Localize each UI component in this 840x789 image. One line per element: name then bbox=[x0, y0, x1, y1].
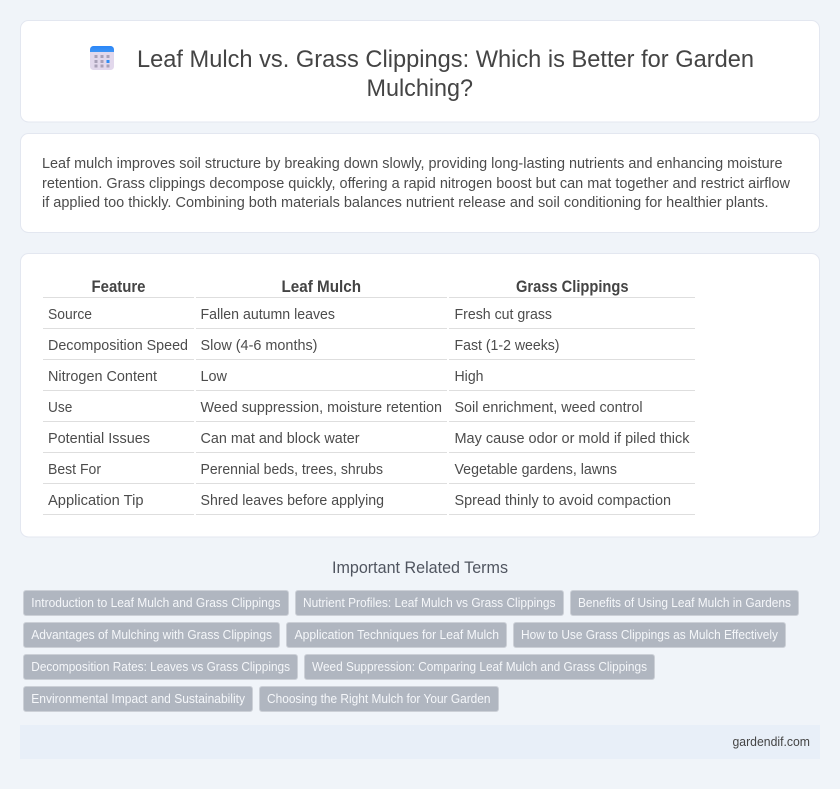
panel: comparison table bbox=[20, 254, 820, 537]
table row: decomposition speed bbox=[43, 338, 695, 360]
table row: source: Fresh cut grass bbox=[454, 307, 552, 323]
footer: gardendif.com bbox=[732, 734, 810, 749]
table header row bbox=[43, 278, 695, 298]
table header row: Leaf Mulch bbox=[282, 278, 361, 296]
text block: summary: if applied too thickly. Combining both materials balances nutrient release and soil conditioning for healthier plants. bbox=[42, 195, 768, 211]
tag: Environmental Impact and Sustainability bbox=[31, 691, 246, 706]
tag bbox=[24, 686, 252, 712]
title: Mulching? bbox=[366, 75, 473, 102]
table row: best for: Best For bbox=[48, 462, 101, 478]
table row: use: Weed suppression, moisture retention bbox=[200, 400, 442, 416]
text block: summary bbox=[42, 156, 790, 211]
table row: nitrogen content: Nitrogen Content bbox=[48, 369, 157, 385]
tag bbox=[24, 654, 298, 680]
tag: Decomposition Rates: Leaves vs Grass Clippings bbox=[31, 659, 290, 674]
table header row: Feature bbox=[92, 278, 146, 296]
table row: use: Soil enrichment, weed control bbox=[454, 400, 642, 416]
icon: calendar bbox=[90, 46, 114, 70]
table row: best for: Perennial beds, trees, shrubs bbox=[200, 462, 383, 478]
title: Leaf Mulch vs. Grass Clippings: Which is Better for Garden bbox=[137, 46, 754, 73]
panel: introduction bbox=[20, 134, 820, 232]
table row: decomposition speed: Fast (1-2 weeks) bbox=[454, 338, 560, 354]
tag: Advantages of Mulching with Grass Clippings bbox=[31, 627, 272, 642]
tag: Benefits of Using Leaf Mulch in Gardens bbox=[578, 595, 791, 610]
table row: potential issues: Potential Issues bbox=[48, 431, 150, 447]
table row: decomposition speed: Slow (4-6 months) bbox=[200, 338, 318, 354]
table row: nitrogen content: High bbox=[454, 369, 484, 385]
tag: Nutrient Profiles: Leaf Mulch vs Grass Clippings bbox=[303, 595, 556, 610]
tag: Application Techniques for Leaf Mulch bbox=[294, 627, 499, 642]
tag bbox=[514, 622, 786, 648]
table row: application tip bbox=[43, 493, 695, 515]
tag bbox=[304, 654, 654, 680]
table row: nitrogen content bbox=[43, 369, 695, 391]
tag bbox=[570, 590, 798, 616]
title bbox=[137, 46, 754, 102]
table row: use: Use bbox=[48, 400, 72, 416]
tag: Choosing the Right Mulch for Your Garden bbox=[267, 691, 490, 706]
table header row: Grass Clippings bbox=[516, 278, 628, 296]
table row: potential issues: May cause odor or mold if piled thick bbox=[454, 431, 690, 447]
table row: best for bbox=[43, 462, 695, 484]
table row: application tip: Shred leaves before applying bbox=[200, 493, 384, 509]
text block: summary: Leaf mulch improves soil structure by breaking down slowly, providing long-lasting nutrients and enhancing moisture bbox=[42, 156, 782, 172]
table row: application tip: Spread thinly to avoid compaction bbox=[454, 493, 671, 509]
table row: potential issues bbox=[43, 431, 695, 453]
table row: source bbox=[43, 307, 695, 329]
text block: summary: retention. Grass clippings decompose quickly, offering a rapid nitrogen boost but can mat together and restrict airflow bbox=[42, 176, 790, 192]
table row: nitrogen content: Low bbox=[200, 369, 227, 385]
table row: source: Fallen autumn leaves bbox=[200, 307, 335, 323]
tag bbox=[296, 590, 564, 616]
tag: Introduction to Leaf Mulch and Grass Clippings bbox=[31, 595, 280, 610]
tag: How to Use Grass Clippings as Mulch Effectively bbox=[521, 627, 779, 642]
tag bbox=[286, 622, 506, 648]
tag bbox=[24, 590, 288, 616]
heading: important related terms: Important Related Terms bbox=[332, 559, 508, 577]
footer bbox=[20, 725, 820, 759]
table row: decomposition speed: Decomposition Speed bbox=[48, 338, 188, 354]
panel: related term tags bbox=[24, 590, 798, 712]
tag bbox=[24, 622, 280, 648]
table row: potential issues: Can mat and block water bbox=[200, 431, 360, 447]
panel: title header bbox=[20, 20, 820, 122]
tag: Weed Suppression: Comparing Leaf Mulch and Grass Clippings bbox=[312, 659, 647, 674]
tag bbox=[260, 686, 498, 712]
table row: source: Source bbox=[48, 307, 92, 323]
table row: use bbox=[43, 400, 695, 422]
table row: application tip: Application Tip bbox=[48, 493, 144, 509]
table row: best for: Vegetable gardens, lawns bbox=[454, 462, 617, 478]
